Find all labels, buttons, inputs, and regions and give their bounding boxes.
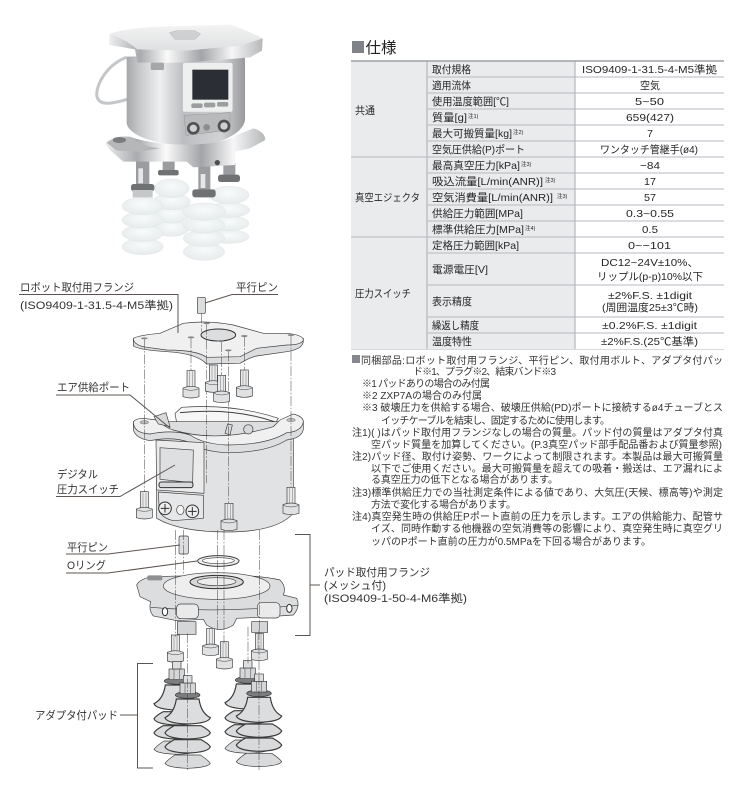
row values: 17	[644, 176, 656, 188]
row values	[582, 63, 718, 348]
row labels: 最高真空圧力[kPa]	[432, 159, 520, 172]
notes text block: ド※1、プラグ※2、結束バンド※3	[413, 365, 556, 378]
row labels: 最大可搬質量[kg]	[432, 127, 512, 140]
label: air supply port: エア供給ポート	[57, 380, 130, 394]
diagram: parallel pin lower	[179, 536, 188, 554]
label: pad mounting flange: (メッシュ付)	[324, 579, 386, 592]
diagram: digital pressure switch	[156, 440, 204, 521]
exploded diagram: lower part	[137, 530, 298, 770]
label: parallel pin top: 平行ピン	[236, 281, 278, 294]
notes text block: 同梱部品:ロボット取付用フランジ、平行ピン、取付用ボルト、アダプタ付パッ	[361, 354, 723, 367]
notes text block: ッパのPポート直前の圧力が0.5MPaを下回る場合があります。	[371, 535, 651, 548]
row labels: 注2)	[513, 128, 524, 136]
diagram: cylinder body	[133, 406, 303, 532]
label: O-ring	[66, 558, 197, 573]
row values: リップル(p-p)10%以下	[597, 271, 703, 283]
row labels: 吸込流量[L/min(ANR)]	[432, 176, 543, 188]
row labels: 質量[g]	[432, 111, 467, 124]
notes text block: ※1 パッドありの場合のみ付属	[362, 377, 490, 390]
row labels: 標準供給圧力[MPa]	[432, 223, 524, 236]
diagram: axis lines lower	[176, 530, 259, 770]
group: pressure switch: 圧力スイッチ	[355, 287, 411, 300]
row labels: 空気圧供給(P)ポート	[432, 143, 525, 156]
photo: pressure switch with display	[183, 63, 233, 135]
diagram: mounting bolts	[136, 365, 299, 531]
notes text block: 注3)標準供給圧力での当社測定条件による値であり、大気圧(天候、標高等)や測定	[352, 486, 723, 499]
row values: ±0.2%F.S. ±1digit	[602, 320, 697, 332]
notes text block: イズ、同時作動する他機器の空気消費等の影響により、真空発生時に真空グリ	[371, 522, 723, 535]
row labels: 取付規格	[432, 63, 471, 76]
row values: ワンタッチ管継手(ø4)	[600, 143, 698, 156]
row labels	[432, 63, 568, 348]
row labels: 定格圧力範囲[kPa]	[432, 239, 519, 252]
label: adapter pad	[35, 664, 153, 768]
exploded diagram: upper part	[133, 297, 303, 532]
label: digital pressure switch: 圧力スイッチ	[57, 483, 119, 496]
diagram: pad mounting flange	[137, 573, 298, 634]
notes text block: 方法で変化する場合があります。	[371, 498, 516, 511]
row labels: 供給圧力範囲[MPa]	[432, 207, 523, 220]
row labels: 使用温度範囲[℃]	[432, 95, 509, 108]
heading: specifications	[352, 39, 397, 57]
row values: 0.3~0.55	[626, 208, 674, 220]
label: pad mounting flange: パッド取付用フランジ	[324, 566, 430, 579]
row labels: 温度特性	[432, 335, 472, 348]
notes text block: 注4)真空発生時の供給圧Pポート直前の圧力を示します。エアの供給能力、配管サ	[352, 510, 723, 523]
label: pad mounting flange: (ISO9409-1-50-4-M6準拠)	[324, 591, 467, 605]
row values: 659(427)	[626, 112, 674, 124]
row labels: 電源電圧[V]	[432, 263, 488, 276]
row values: −84	[640, 160, 660, 172]
diagram: O-ring	[198, 556, 239, 566]
label: parallel pin lower: 平行ピン	[67, 541, 108, 554]
row labels: 表示精度	[432, 295, 472, 308]
diagram: top robot flange	[133, 322, 303, 364]
label: air supply port	[56, 380, 170, 428]
row values: ±2%F.S. ±1digit	[608, 290, 692, 302]
label: digital pressure switch	[56, 465, 175, 496]
label: pad mounting flange	[295, 534, 467, 636]
product photo: vacuum gripper	[97, 25, 265, 260]
notes text block: 空パッド質量を加算してください。(P.3真空パッド部手配品番および質量参照)	[371, 438, 722, 451]
photo: suction pads	[122, 179, 250, 260]
row values: 0.5	[642, 224, 658, 236]
diagram: parallel pin	[197, 297, 205, 313]
group: vacuum ejector: 真空エジェクタ	[355, 191, 420, 204]
notes text block: 注1)( )はパッド取付用フランジなしの場合の質量。パッド付の質量はアダプタ付真	[352, 426, 723, 439]
row labels: 注4)	[525, 224, 536, 232]
photo: tube cable	[97, 57, 127, 103]
notes text block: イッチケーブルを結束し、固定するために使用します。	[381, 414, 610, 427]
notes text block: 注2)パッド径、取付け姿勢、ワークによって制限されます。本製品は最大可搬質量	[352, 450, 723, 463]
row values: DC12~24V±10%、	[601, 257, 699, 269]
label: O-ring: Oリング	[67, 558, 106, 572]
label: robot mounting flange: ロボット取付用フランジ	[20, 281, 134, 294]
photo: lower flange	[105, 128, 265, 167]
label: digital pressure switch: デジタル	[57, 467, 98, 481]
label: adapter pad: アダプタ付パッド	[35, 708, 118, 722]
row labels: 注3)	[545, 176, 556, 184]
row labels: 注3)	[521, 160, 532, 168]
row values: (周囲温度25±3℃時)	[602, 301, 698, 314]
diagram: adapter pads	[154, 661, 282, 768]
notes text block: る真空圧力の低下となる場合があります。	[371, 473, 558, 486]
row labels: 注3)	[557, 192, 568, 200]
row values: ±2%F.S.(25℃基準)	[601, 335, 698, 348]
group: common: 共通	[355, 105, 375, 117]
photo: cylinder body	[127, 53, 245, 146]
label: parallel pin lower	[66, 541, 180, 554]
photo: top flange	[109, 25, 263, 70]
label: robot mounting flange: (ISO9409-1-31.5-4-M5準拠)	[20, 298, 173, 312]
label: parallel pin top	[205, 281, 278, 303]
row values: 空気	[640, 79, 660, 92]
photo: pad fittings	[131, 160, 240, 197]
notes text block: ※2 ZXP7Aの場合のみ付属	[362, 389, 482, 402]
row values: ISO9409-1-31.5-4-M5準拠	[582, 63, 718, 76]
specification table	[351, 61, 724, 350]
diagram: lower screws and adapters	[167, 628, 267, 669]
notes text block: ※3 破壊圧力を供給する場合、破壊圧供給(PD)ポートに接続するø4チューブとス	[362, 401, 723, 414]
row values: 0~−101	[628, 240, 671, 252]
notes text block	[352, 354, 723, 548]
row values: 7	[647, 128, 653, 140]
row labels: 繰返し精度	[432, 319, 479, 332]
heading: specifications: 仕様	[366, 39, 397, 57]
label: robot mounting flange	[19, 281, 178, 333]
row values: 57	[644, 192, 656, 204]
row labels: 適用流体	[432, 79, 471, 92]
row labels: 注1)	[468, 112, 479, 120]
notes text block: 以下でご使用ください。最大可搬質量を超えての吸着・搬送は、エア漏れによ	[371, 462, 723, 475]
row labels: 空気消費量[L/min(ANR)]	[432, 191, 553, 204]
diagram: axis lines	[144, 313, 291, 503]
row values: 5~50	[635, 96, 664, 108]
